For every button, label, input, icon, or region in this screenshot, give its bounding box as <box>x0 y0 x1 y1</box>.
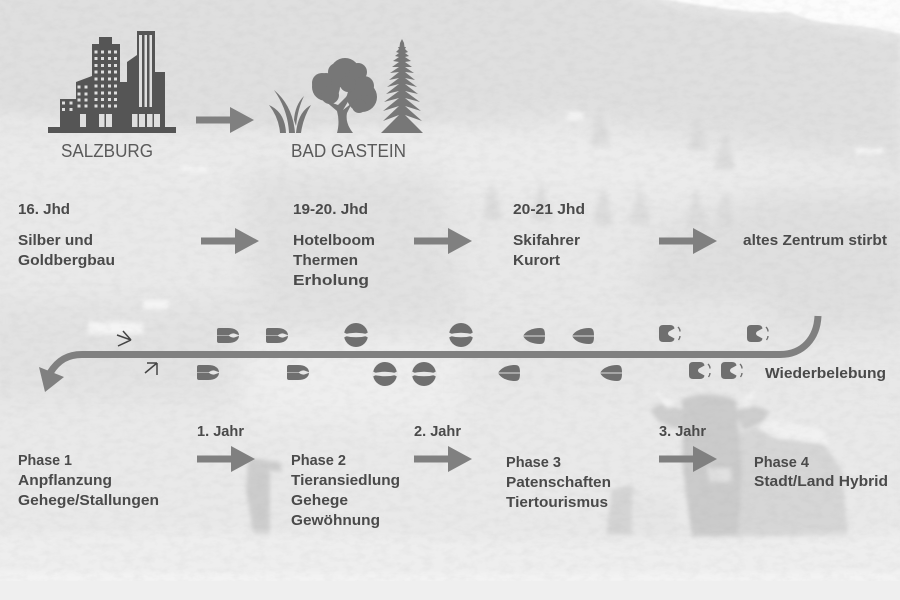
phase 2: Gewöhnung <box>291 512 380 529</box>
label: Bad Gastein: BAD GASTEIN <box>291 141 406 161</box>
phase 1: Phase 1 <box>18 452 72 469</box>
track: bird prints <box>117 331 157 375</box>
track: hoof prints, type C <box>498 328 622 381</box>
phase 4: Stadt/Land Hybrid <box>754 473 888 490</box>
icon: fir <box>381 39 423 133</box>
phase 2: Gehege <box>291 492 348 509</box>
phase 3: Phase 3 <box>506 454 561 471</box>
track: hoof prints, type A <box>197 328 309 380</box>
icon: grass <box>269 90 311 133</box>
arrow: to 19-20. Jhd <box>201 228 259 254</box>
timeline: 20-21 Jhd: Skifahrer <box>513 232 580 249</box>
arrow: to 20-21 Jhd <box>414 228 472 254</box>
track: hoof prints, type D <box>659 325 768 379</box>
timeline: 16. Jhd: Silber und <box>18 232 93 249</box>
phase 2: Phase 2 <box>291 452 346 469</box>
animal tracks along the path <box>117 323 768 386</box>
timeline: 19-20. Jhd <box>293 201 375 289</box>
track: hoof prints, type B <box>343 323 474 386</box>
label: 3. Jahr: 3. Jahr <box>659 423 706 440</box>
phase 2: Tieransiedlung <box>291 472 400 489</box>
icon: grass, tree and fir <box>269 39 423 133</box>
phase 2 <box>291 452 400 529</box>
timeline: 19-20. Jhd: Hotelboom <box>293 232 375 249</box>
timeline: 16. Jhd <box>18 201 115 269</box>
arrow: phase 3 to 4 <box>659 446 717 472</box>
arrow: phase 1 to 2 <box>197 446 255 472</box>
arrow: to altes Zentrum <box>659 228 717 254</box>
label: 2. Jahr: 2. Jahr <box>414 423 461 440</box>
curved arrow: Wiederbelebung path <box>39 316 818 392</box>
text: altes Zentrum stirbt: altes Zentrum stirbt <box>743 232 887 249</box>
phase 4 <box>754 454 888 490</box>
timeline: 20-21 Jhd: 20-21 Jhd <box>513 201 585 218</box>
timeline: 16. Jhd: 16. Jhd <box>18 201 70 218</box>
arrow: Salzburg to Bad Gastein <box>196 107 254 133</box>
phase 3: Tiertourismus <box>506 494 608 511</box>
timeline: 20-21 Jhd: Kurort <box>513 252 560 269</box>
phase 4: Phase 4 <box>754 454 810 471</box>
phase 1 <box>18 452 159 509</box>
timeline: 19-20. Jhd: Thermen <box>293 252 358 269</box>
arrow: phase 2 to 3 <box>414 446 472 472</box>
phase 1: Anpflanzung <box>18 472 112 489</box>
phase 3 <box>506 454 611 511</box>
text: Wiederbelebung: Wiederbelebung <box>765 365 886 382</box>
timeline: 16. Jhd: Goldbergbau <box>18 252 115 269</box>
phase 3: Patenschaften <box>506 474 611 491</box>
timeline: 19-20. Jhd: 19-20. Jhd <box>293 201 368 218</box>
icon: Salzburg city skyline <box>48 31 176 133</box>
icon: tree <box>312 58 377 133</box>
large cow, calf and distant cow <box>246 385 848 537</box>
phase 1: Gehege/Stallungen <box>18 492 159 509</box>
label: 1. Jahr: 1. Jahr <box>197 423 244 440</box>
timeline: 20-21 Jhd <box>513 201 585 269</box>
label: Salzburg: SALZBURG <box>61 141 153 161</box>
timeline: 19-20. Jhd: Erholung <box>293 272 369 289</box>
